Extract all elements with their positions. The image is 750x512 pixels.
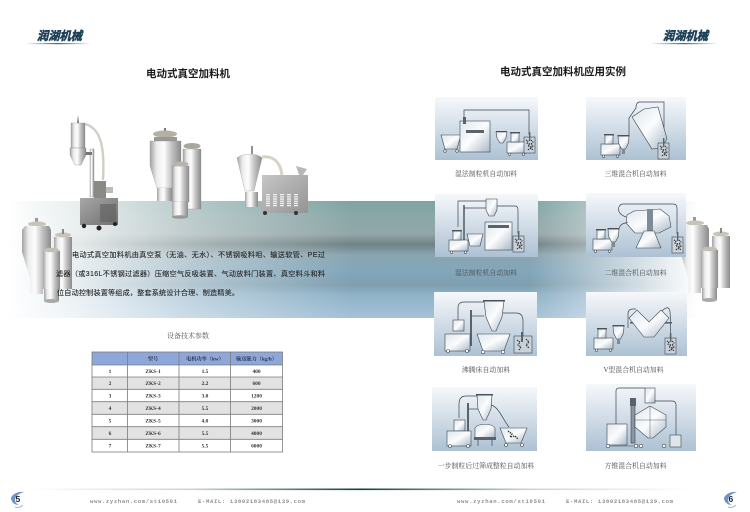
parameters table: 1200 xyxy=(251,394,262,400)
parameters table: 2.2 xyxy=(202,381,209,387)
parameters table: 7 xyxy=(109,444,112,450)
machine: vacuum feeder with cabinet xyxy=(237,146,308,215)
title: left: 电动式真空加料机 xyxy=(146,67,230,80)
parameters table: 5 xyxy=(109,418,112,424)
parameters table: 6 xyxy=(109,431,112,437)
parameters table: ZKS-7 xyxy=(145,444,161,450)
parameters table: 4.0 xyxy=(202,418,209,424)
description text: 位自动控制装置等组成，整套系统设计合理、制造精美。 xyxy=(57,288,239,297)
panel: conical mixer xyxy=(586,384,696,451)
parameters table: 4 xyxy=(109,406,112,412)
footer contact left: www.zyzhan.com/st10501 xyxy=(90,498,178,505)
page number 5 xyxy=(11,492,24,507)
parameters table: ZKS-5 xyxy=(145,418,161,424)
parameters table: 4000 xyxy=(251,431,262,437)
table title: 设备技术参数 xyxy=(167,331,209,340)
page number 6 xyxy=(724,492,737,507)
parameters table: 输送能力（kg/h） xyxy=(236,354,277,362)
parameters table: ZKS-3 xyxy=(145,394,161,400)
caption: one-step granulation: 一步制粒后过筛成整粒自动加料 xyxy=(438,461,534,470)
panel: 3D mixer xyxy=(586,97,686,160)
caption: conical mixer: 方锥混合机自动加料 xyxy=(604,461,667,470)
caption: fluid bed: 沸腾床自动加料 xyxy=(462,365,510,374)
panel: V mixer xyxy=(586,292,687,356)
parameters table: 5.5 xyxy=(202,431,209,437)
panel: fluid bed xyxy=(434,292,537,356)
footer contact right: www.zyzhan.com/st10501 xyxy=(457,498,546,505)
parameters table: 6000 xyxy=(251,444,262,450)
logo: right: 润湖机械 xyxy=(663,29,710,43)
panel: one-step granulation xyxy=(432,387,537,451)
footer rule xyxy=(30,488,690,490)
machine: hopper cluster right xyxy=(680,217,730,302)
page number 5: 5 xyxy=(16,494,20,504)
parameters table: 3 xyxy=(109,394,112,400)
caption: wet granulator 1: 湿法制粒机自动加料 xyxy=(455,169,517,178)
parameters table: 400 xyxy=(252,369,261,375)
caption: V mixer: V型混合机自动加料 xyxy=(603,365,664,374)
parameters table: ZKS-6 xyxy=(145,431,161,437)
title: right: 电动式真空加料机应用实例 xyxy=(500,65,626,78)
page number 6: 6 xyxy=(728,494,734,504)
parameters table: ZKS-4 xyxy=(145,406,161,412)
background band xyxy=(7,201,698,318)
machine: hopper cluster left xyxy=(22,218,72,303)
logo: left xyxy=(25,29,91,44)
parameters table: 5.5 xyxy=(202,406,209,412)
caption: wet granulator 2: 湿法制粒机自动加料 xyxy=(455,268,517,277)
machine: stainless hopper group xyxy=(150,128,201,219)
caption: 2D mixer: 二维混合机自动加料 xyxy=(604,268,667,277)
caption: 3D mixer: 三维混合机自动加料 xyxy=(604,169,667,178)
description text: 滤器（或316L不锈钢过滤器）压缩空气反吸装置、气动放料门装置、真空料斗和料 xyxy=(56,269,325,278)
parameters table: ZKS-1 xyxy=(145,369,161,375)
parameters table: 2 xyxy=(109,381,112,387)
footer contact left xyxy=(90,498,306,505)
parameters table: ZKS-2 xyxy=(145,381,161,387)
parameters table: 5.5 xyxy=(202,444,209,450)
logo: left: 润湖机械 xyxy=(37,29,84,43)
description text: 电动式真空加料机由真空泵（无油、无水）、不锈钢吸料咀、输送软管、PE过 xyxy=(72,250,325,259)
description text xyxy=(56,250,325,297)
machine: single feeder on stand xyxy=(70,115,118,230)
panel: 2D mixer xyxy=(586,193,686,257)
panel: wet granulator 2 xyxy=(435,194,538,257)
footer contact left: E-MAIL: 13802183485@139.com xyxy=(198,498,306,505)
footer contact right: E-MAIL: 13802183485@139.com xyxy=(566,498,674,505)
parameters table: 型号 xyxy=(148,354,159,362)
logo: right xyxy=(650,29,718,44)
parameters table: 1 xyxy=(109,369,112,375)
parameters table: 600 xyxy=(252,381,261,387)
parameters table xyxy=(92,352,282,452)
parameters table: 2000 xyxy=(251,406,262,412)
panel: wet granulator 1 xyxy=(435,97,538,160)
footer contact right xyxy=(457,498,674,505)
parameters table: 1.5 xyxy=(202,369,209,375)
parameters table: 电机功率（kw） xyxy=(186,354,224,362)
parameters table: 3.0 xyxy=(202,394,209,400)
parameters table: 3000 xyxy=(251,418,262,424)
